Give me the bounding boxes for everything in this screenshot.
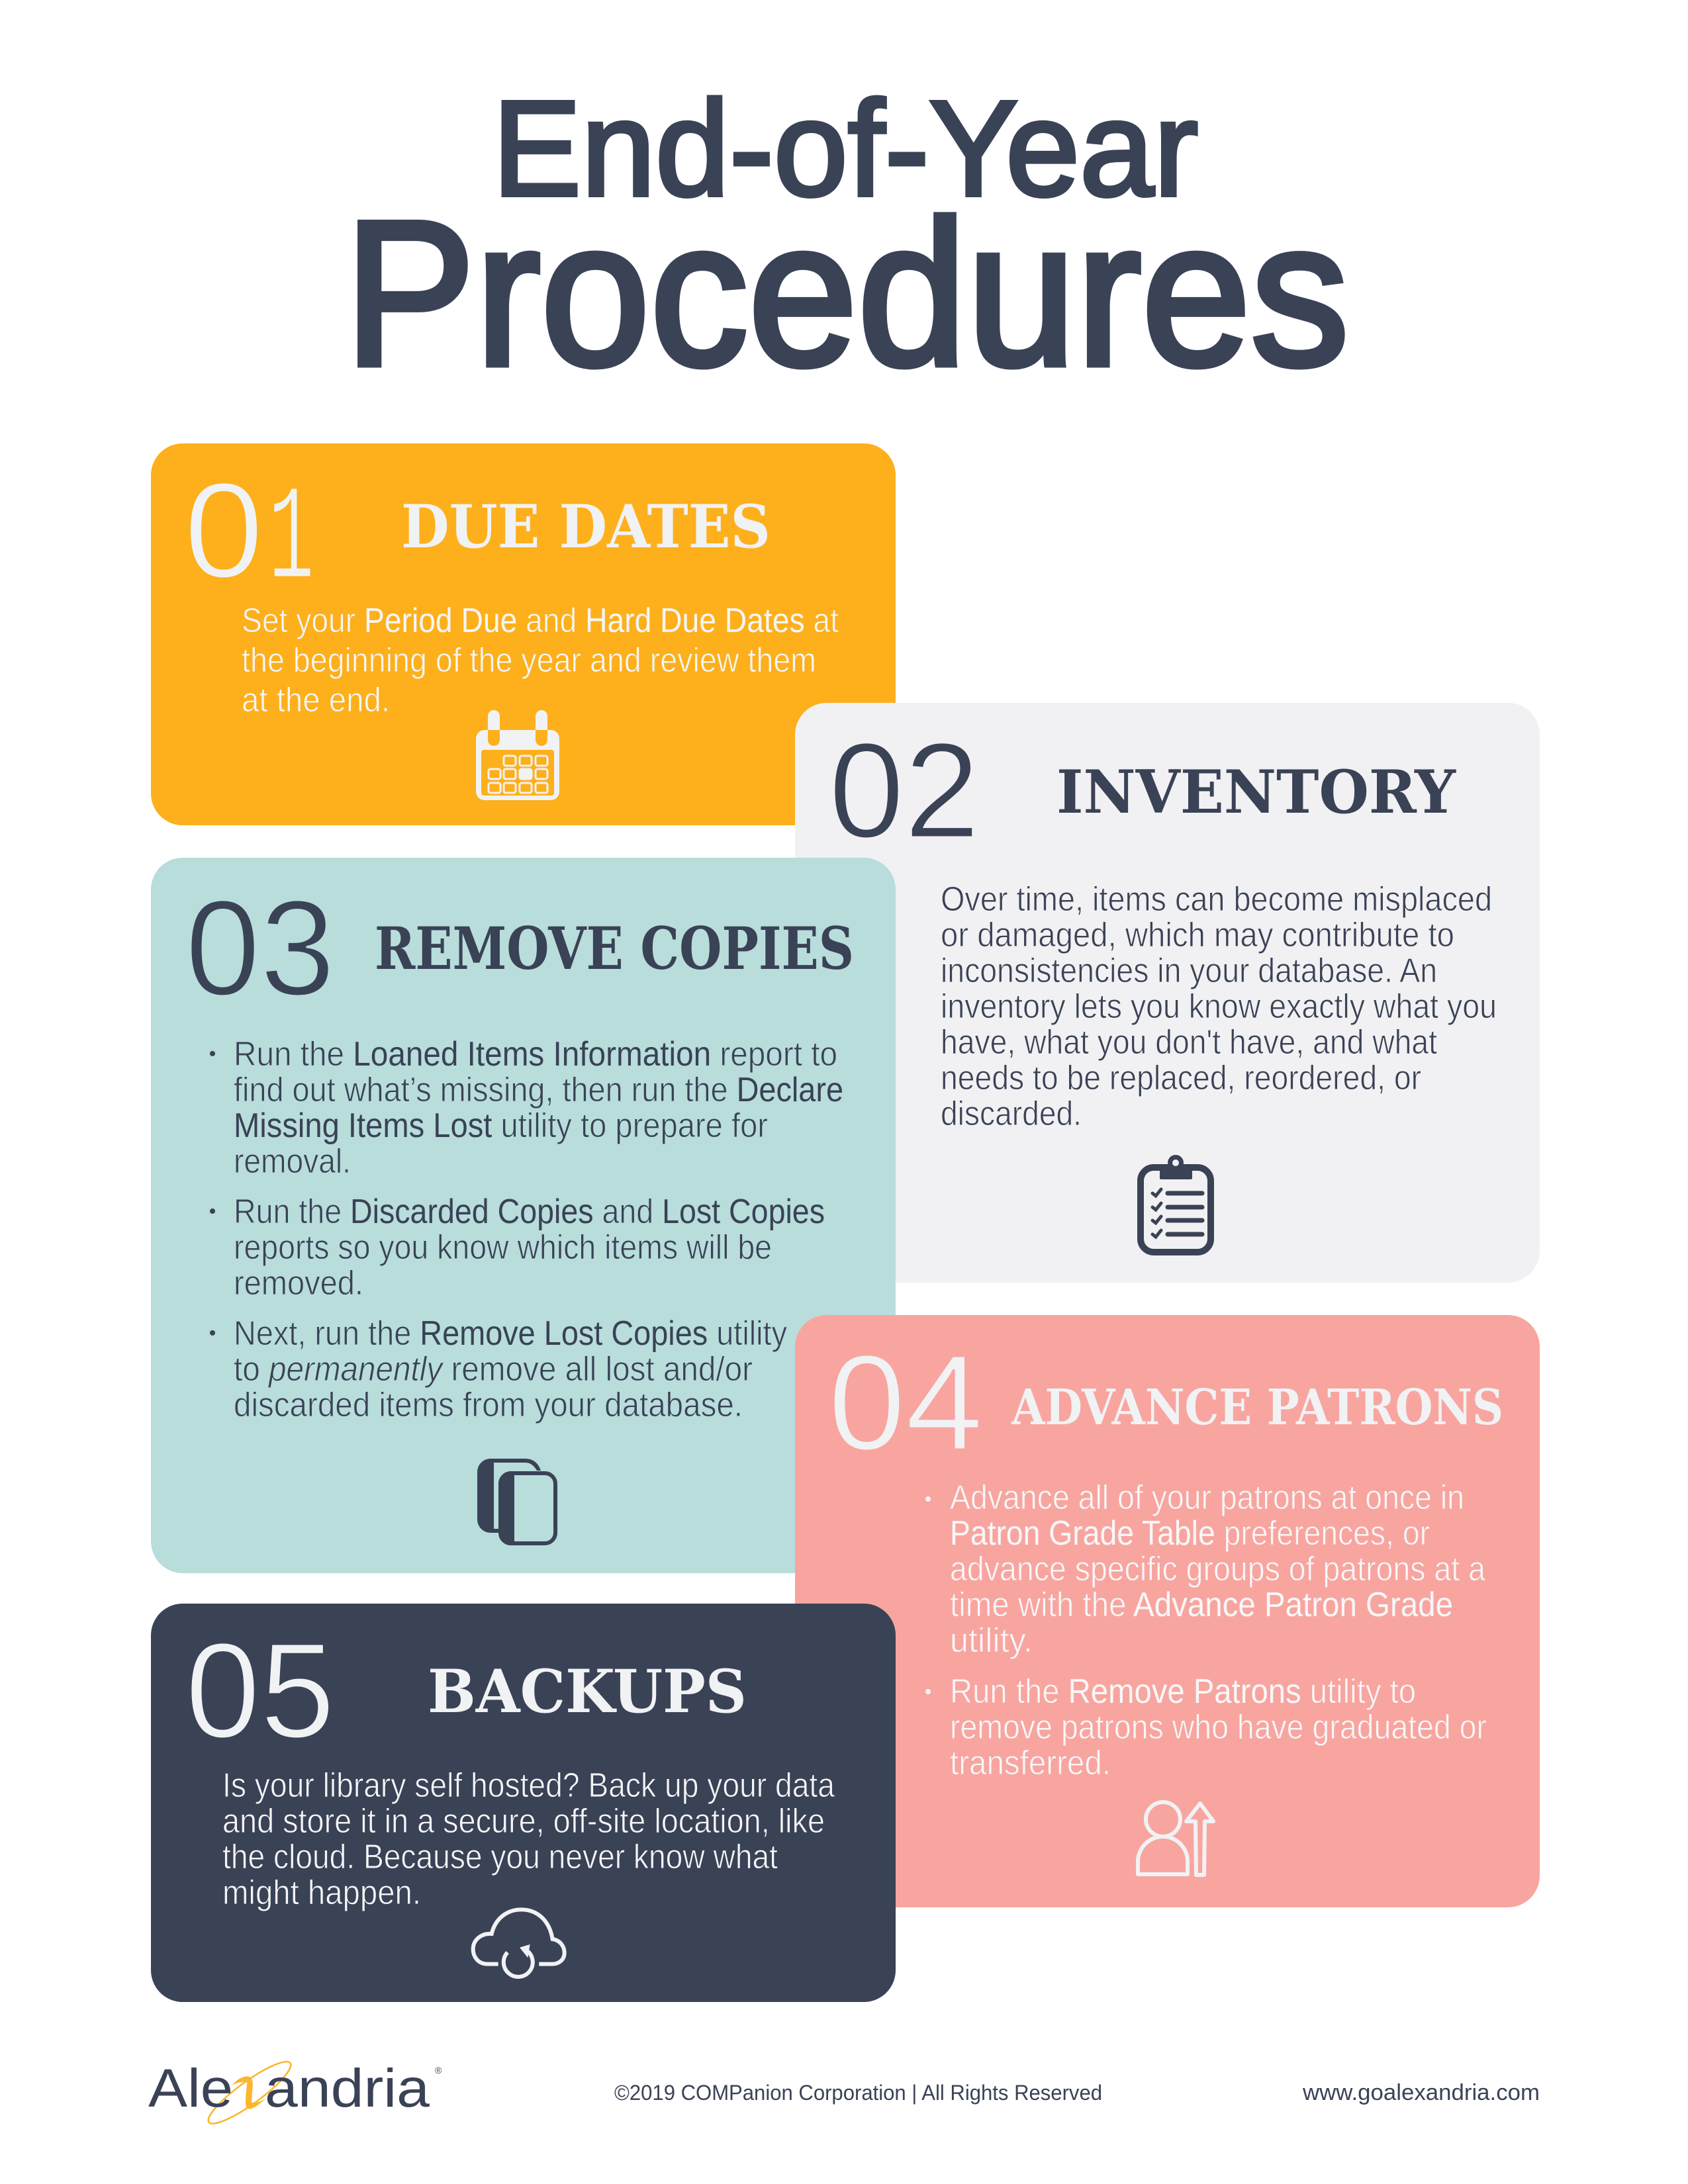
text: inventory body: have, what you don't have, and what xyxy=(941,1023,1437,1062)
text: inventory body: inventory lets you know exactly what you xyxy=(941,987,1497,1026)
text: advance patrons bullets: advance specific groups of patrons at a xyxy=(950,1550,1485,1588)
panel: 03 remove copies xyxy=(151,858,896,1573)
text: backups body: Is your library self hosted? Back up your data xyxy=(222,1766,835,1805)
text: remove copies bullets: to permanently remove all lost and/or xyxy=(234,1350,753,1388)
logo: Alexandria xyxy=(148,2054,442,2131)
text: remove copies bullets: discarded items from your database. xyxy=(234,1386,743,1424)
text: advance patrons bullets: Patron Grade Table preferences, or xyxy=(950,1514,1430,1553)
icon: copies xyxy=(477,1459,555,1545)
heading: advance patrons: ADVANCE PATRONS xyxy=(1011,1379,1503,1436)
text: backups body: might happen. xyxy=(222,1874,421,1912)
number 01: 1 xyxy=(268,464,314,618)
heading: remove copies: REMOVE COPIES xyxy=(375,914,854,983)
text: backups body xyxy=(222,1766,835,1912)
panel: 05 backups xyxy=(151,1604,896,2002)
number 01 xyxy=(184,455,314,618)
text: remove copies bullets: Next, run the Remove Lost Copies utility xyxy=(234,1314,787,1353)
number 01: 0 xyxy=(184,455,263,606)
text: advance patrons bullets xyxy=(925,1479,1487,1782)
text: remove copies bullets: reports so you know which items will be xyxy=(234,1228,772,1267)
text: backups body: and store it in a secure, off-site location, like xyxy=(222,1802,825,1841)
logo swoosh xyxy=(203,2054,297,2131)
text: inventory body: Over time, items can become misplaced xyxy=(941,880,1492,919)
text: remove copies bullets: removed. xyxy=(234,1264,363,1302)
text: due dates body xyxy=(242,602,839,719)
text: backups body: the cloud. Because you never know what xyxy=(222,1838,778,1876)
icon: calendar xyxy=(476,710,559,800)
text: remove copies bullets: Missing Items Lost utility to prepare for xyxy=(234,1107,768,1145)
text: advance patrons bullets: time with the Advance Patron Grade xyxy=(950,1586,1453,1624)
text: advance patrons bullets: remove patrons who have graduated or xyxy=(950,1708,1487,1747)
panel: 04 advance patrons xyxy=(795,1315,1540,1907)
logo: Alexandria: Ale xyxy=(148,2058,233,2118)
text: due dates body: the beginning of the year and review them xyxy=(242,641,816,680)
title xyxy=(344,73,1349,409)
text: inventory body: discarded. xyxy=(941,1095,1082,1133)
text: inventory body: needs to be replaced, reordered, or xyxy=(941,1059,1421,1097)
logo: Alexandria: andria xyxy=(265,2058,430,2118)
footer: copyright: ©2019 COMPanion Corporation | All Rights Reserved xyxy=(614,2081,1102,2105)
text: remove copies bullets: find out what’s missing, then run the Declare xyxy=(234,1071,843,1109)
text: remove copies bullets xyxy=(210,1035,843,1424)
icon: cloud backup xyxy=(473,1909,565,1977)
footer: website: www.goalexandria.com xyxy=(1302,2080,1540,2105)
text: inventory body: or damaged, which may contribute to xyxy=(941,916,1454,954)
title: End-of-Year xyxy=(492,73,1198,224)
panel: 01 due dates xyxy=(151,443,896,825)
text: advance patrons bullets: utility. xyxy=(950,1621,1033,1660)
text: advance patrons bullets: Run the Remove Patrons utility to xyxy=(950,1672,1416,1711)
number 02: 02 xyxy=(829,715,980,866)
text: due dates body: Set your Period Due and Hard Due Dates at xyxy=(242,602,839,640)
logo: Alexandria: ® xyxy=(435,2065,442,2075)
title: Procedures xyxy=(344,179,1349,409)
heading: due dates: DUE DATES xyxy=(401,492,771,562)
number 04: 04 xyxy=(828,1327,983,1479)
text: remove copies bullets: removal. xyxy=(234,1142,351,1181)
panel: 02 inventory xyxy=(795,703,1540,1283)
number 03: 03 xyxy=(185,872,335,1024)
icon: patron with up arrow xyxy=(1138,1802,1213,1875)
heading: backups: BACKUPS xyxy=(428,1657,747,1727)
text: remove copies bullets: Run the Loaned Items Information report to xyxy=(234,1035,837,1073)
text: due dates body: at the end. xyxy=(242,681,390,719)
icon: clipboard xyxy=(1141,1155,1211,1252)
text: advance patrons bullets: Advance all of your patrons at once in xyxy=(950,1479,1464,1517)
text: advance patrons bullets: transferred. xyxy=(950,1744,1111,1782)
text: inventory body: inconsistencies in your database. An xyxy=(941,952,1437,990)
heading: inventory: INVENTORY xyxy=(1056,757,1457,827)
text: inventory body xyxy=(941,880,1497,1133)
number 05: 05 xyxy=(185,1615,335,1766)
text: remove copies bullets: Run the Discarded Copies and Lost Copies xyxy=(234,1193,825,1231)
